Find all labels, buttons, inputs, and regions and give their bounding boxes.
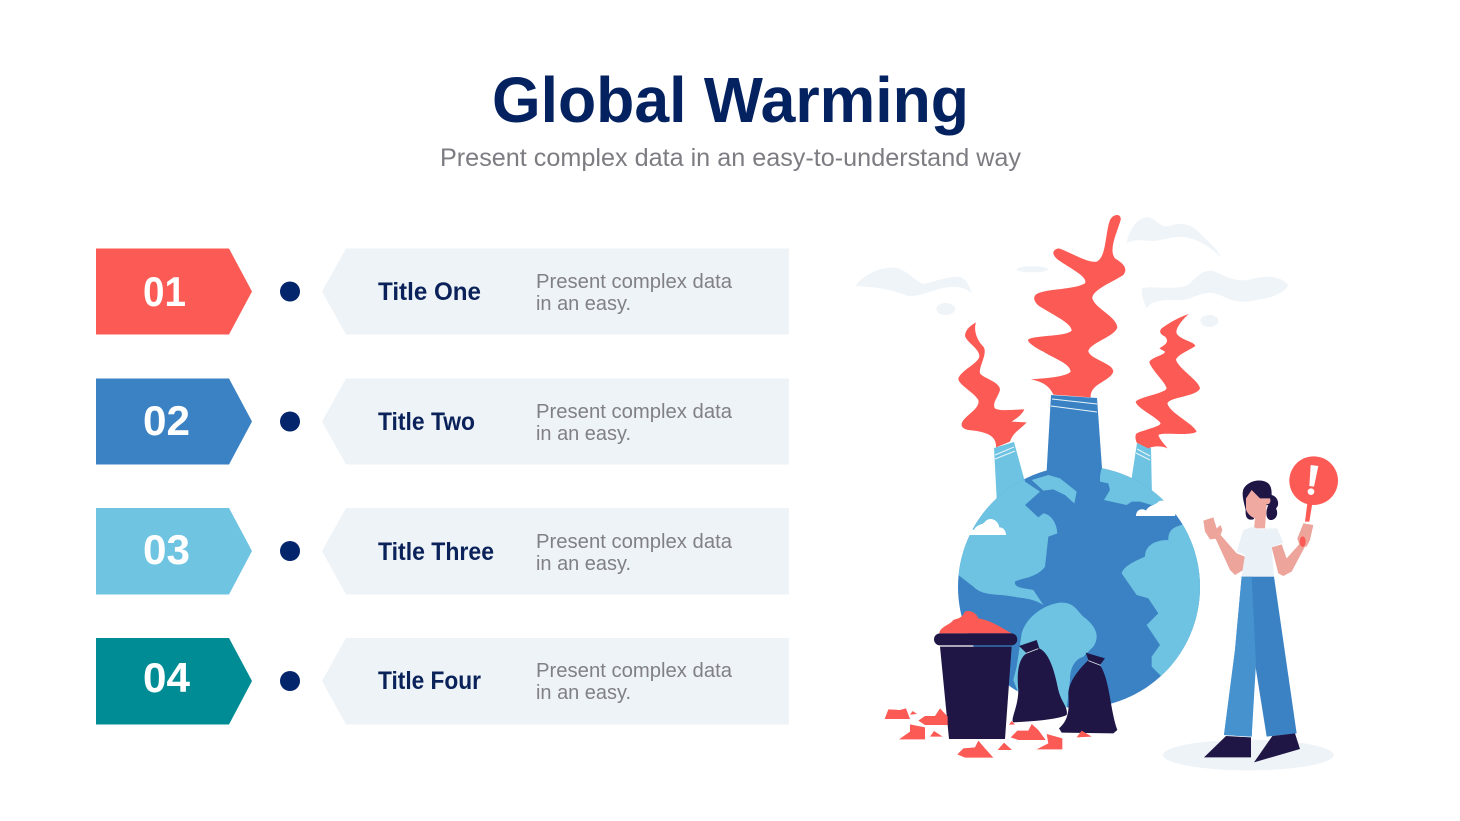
row 4: Title Four — [96, 638, 789, 724]
globe — [958, 468, 1200, 708]
text panel 4: in an easy. — [536, 682, 631, 704]
text panel 2 — [322, 378, 789, 464]
warning sign — [1289, 456, 1338, 522]
dot 4 — [280, 671, 300, 691]
trousers — [1224, 577, 1297, 737]
text panel 1: in an easy. — [536, 293, 631, 315]
text panel 1: Title One — [378, 278, 481, 306]
garbage bag 2 — [1059, 653, 1117, 733]
head and neck — [1246, 490, 1270, 528]
number badge 03: 03 — [143, 526, 190, 573]
number badge 01: 01 — [143, 268, 186, 315]
trash pile — [939, 611, 1012, 633]
chimneys — [994, 395, 1152, 505]
holding hand — [1297, 523, 1313, 547]
dot 2 — [280, 412, 300, 432]
dot 3 — [280, 541, 300, 561]
text panel 1 — [322, 248, 789, 334]
number badge 03 — [96, 508, 252, 594]
text panel 4: Present complex data — [536, 660, 733, 682]
number badge 01 — [96, 248, 252, 334]
t-shirt — [1237, 527, 1283, 576]
number badge 02: 02 — [143, 397, 190, 444]
arms — [1215, 535, 1305, 576]
center chimney — [1046, 395, 1103, 482]
text panel 3: in an easy. — [536, 553, 631, 575]
white clouds — [966, 519, 1006, 535]
row 1: Title One — [96, 248, 789, 334]
text panel 4: Title Four — [378, 667, 481, 695]
number badge 04: 04 — [143, 654, 191, 701]
text panel 4 — [322, 638, 789, 724]
illustration: global warming scene — [855, 215, 1338, 770]
bin — [940, 647, 1012, 739]
text panel 3 — [322, 508, 789, 594]
smoke clouds — [855, 217, 1288, 327]
raised hand — [1203, 517, 1222, 539]
text panel 2: Title Two — [378, 408, 475, 436]
row 2: Title Two — [96, 378, 789, 464]
number badge 02 — [96, 378, 252, 464]
row 3: Title Three — [96, 508, 789, 594]
hair — [1243, 481, 1278, 520]
title: Global Warming — [492, 64, 969, 136]
woman holding warning sign — [1163, 456, 1338, 770]
text panel 3: Title Three — [378, 538, 494, 566]
subtitle: Present complex data in an easy-to-understand way — [440, 144, 1021, 172]
trash bin and bags — [885, 611, 1117, 758]
flames — [958, 215, 1200, 448]
text panel 2: Present complex data — [536, 401, 733, 423]
text panel 2: in an easy. — [536, 423, 631, 445]
left chimney — [994, 442, 1025, 505]
debris — [885, 708, 1092, 758]
ground shadow — [1163, 740, 1334, 770]
number badge 04 — [96, 638, 252, 724]
right chimney — [1131, 443, 1152, 497]
text panel 1: Present complex data — [536, 271, 733, 293]
text panel 3: Present complex data — [536, 531, 733, 553]
dot 1 — [280, 282, 300, 302]
garbage bag 1 — [1013, 640, 1067, 722]
shoes — [1204, 736, 1251, 757]
